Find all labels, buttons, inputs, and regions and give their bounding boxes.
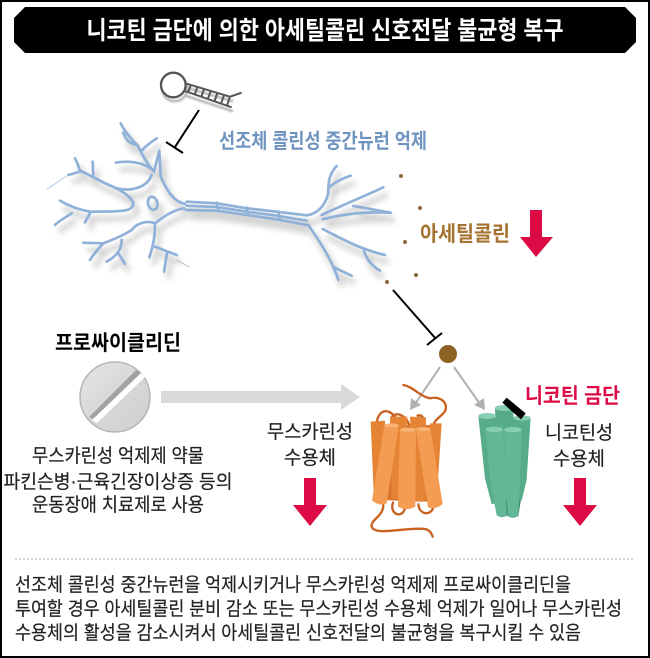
text: procyclidine description: 파킨슨병·근육긴장이상증 등의 bbox=[4, 471, 232, 493]
title banner: 니코틴 금단에 의한 아세틸콜린 신호전달 불균형 복구 bbox=[86, 17, 564, 45]
label: muscarinic receptor bbox=[267, 421, 353, 469]
text: procyclidine description: 무스카린성 억제제 약물 bbox=[32, 445, 204, 467]
nicotinic receptor illustration bbox=[478, 398, 531, 518]
arrow: muscarinic decrease bbox=[293, 478, 327, 526]
nicotine block bar bbox=[502, 398, 526, 419]
label: striatal cholinergic interneuron inhibition: 선조체 콜린성 중간뉴런 억제 bbox=[219, 130, 427, 153]
icon: pill bbox=[80, 362, 150, 432]
arrow: procyclidine to muscarinic receptor bbox=[161, 384, 360, 410]
label: nicotinic receptor: 니코틴성 bbox=[545, 422, 613, 444]
label: nicotinic receptor: 수용체 bbox=[553, 448, 605, 470]
title banner bbox=[14, 7, 636, 53]
heading: procyclidine: 프로싸이클리딘 bbox=[55, 332, 181, 355]
inhibition symbol: aptamer to neuron bbox=[166, 110, 199, 153]
acetylcholine molecule bbox=[439, 345, 457, 363]
arrow: to muscarinic receptor bbox=[410, 367, 440, 410]
arrow: nicotinic decrease bbox=[563, 478, 597, 526]
icon: aptamer hairpin bbox=[161, 73, 242, 111]
summary text: 선조체 콜린성 중간뉴런을 억제시키거나 무스카린성 억제제 프로싸이클리딘을 bbox=[15, 574, 571, 596]
muscarinic receptor illustration bbox=[371, 385, 446, 537]
arrow: acetylcholine decrease bbox=[520, 210, 553, 257]
summary text: 수용체의 활성을 감소시켜서 아세틸콜린 신호전달의 불균형을 복구시킬 수 있음 bbox=[15, 622, 581, 644]
label: muscarinic receptor: 무스카린성 bbox=[267, 421, 353, 443]
label: nicotinic receptor bbox=[545, 422, 613, 470]
label: muscarinic receptor: 수용체 bbox=[284, 447, 336, 469]
label: nicotine withdrawal: 니코틴 금단 bbox=[525, 385, 620, 408]
arrow: to nicotinic receptor bbox=[454, 367, 485, 410]
acetylcholine dots bbox=[385, 174, 422, 284]
inhibition symbol: neuron to acetylcholine bbox=[393, 290, 442, 345]
label: acetylcholine: 아세틸콜린 bbox=[420, 223, 510, 246]
summary text bbox=[15, 574, 622, 644]
neuron illustration bbox=[47, 123, 395, 287]
text: procyclidine description: 운동장애 치료제로 사용 bbox=[32, 494, 204, 516]
text: procyclidine description bbox=[4, 445, 232, 516]
